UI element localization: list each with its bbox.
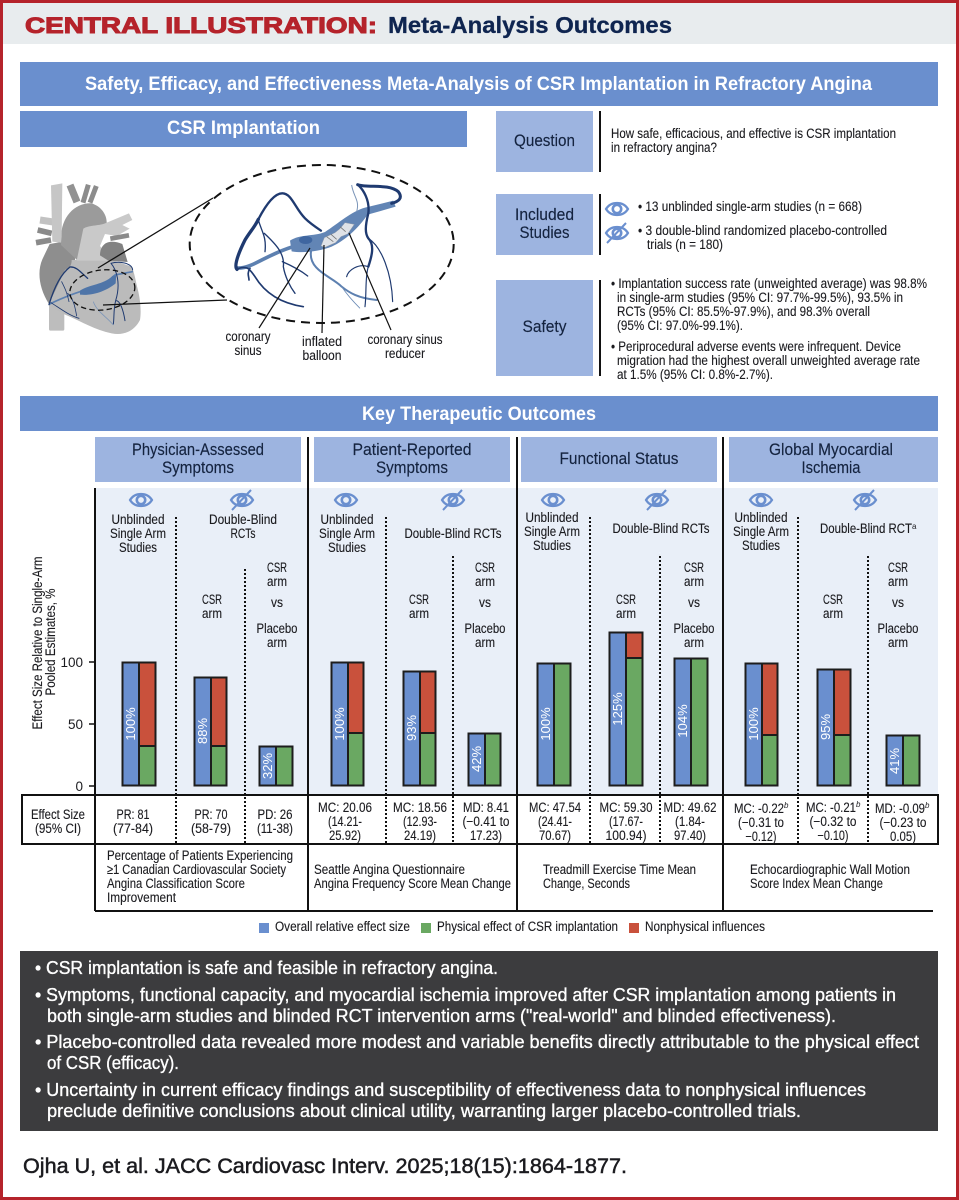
bar: 100% xyxy=(537,663,571,786)
panel: included studies: • 3 double-blind randomized placebo-controlled xyxy=(638,223,887,238)
panel: CSR implantation heading: CSR Implantation xyxy=(167,117,320,139)
values: patient-reported symptoms: (−0.41 to xyxy=(462,814,510,829)
sub-heading: unblinded single arm studies: Studies xyxy=(119,540,157,555)
sub-heading: CSR arm: arm xyxy=(616,606,636,621)
measure: CCS angina class improvement xyxy=(107,848,293,905)
sub-heading: unblinded single arm studies: Studies xyxy=(533,538,571,553)
label: coronary sinus xyxy=(226,248,310,358)
sub-heading: double-blind RCTs xyxy=(612,490,710,536)
column heading: patient-reported symptoms: Patient-Reported xyxy=(352,440,472,459)
heading: key therapeutic outcomes xyxy=(20,396,938,431)
bar: 100% xyxy=(122,662,156,786)
values: patient-reported symptoms: 25.92) xyxy=(329,828,361,843)
sub-heading: CSR arm vs placebo arm: arm xyxy=(888,574,908,589)
sub-heading: CSR arm xyxy=(202,592,222,621)
panel: question xyxy=(496,111,896,172)
values: physician-assessed symptoms: PD: 26 xyxy=(258,807,292,822)
sub-heading: double-blind RCTs xyxy=(404,490,502,541)
values: physician-assessed symptoms: (77-84) xyxy=(113,821,153,836)
sub-heading: unblinded single arm studies xyxy=(319,494,375,555)
column heading: global myocardial ischemia: Ischemia xyxy=(802,458,861,477)
sub-heading: CSR arm vs placebo arm: arm xyxy=(475,574,495,589)
sub-heading: CSR arm vs placebo arm xyxy=(256,560,298,650)
measure: wall motion score index: Echocardiographic Wall Motion xyxy=(750,862,910,877)
bar: 100%: 100% xyxy=(332,707,347,741)
column heading: physician-assessed symptoms: Physician-Assessed xyxy=(132,440,264,459)
panel: safety: migration had the highest overall unweighted average rate xyxy=(617,353,920,368)
bar: 125%: 125% xyxy=(610,692,625,726)
values: functional status: (17.67- xyxy=(609,814,643,829)
values: functional status: 97.40) xyxy=(674,828,706,843)
column heading: functional status xyxy=(521,437,717,482)
bar: 125% xyxy=(609,632,643,786)
sub-heading: CSR arm: arm xyxy=(409,606,429,621)
chart panel background xyxy=(95,488,938,794)
values: global myocardial ischemia: b xyxy=(925,801,930,810)
sub-heading: double-blind RCTs xyxy=(209,490,277,541)
sub-heading: CSR arm vs placebo arm: arm xyxy=(267,574,287,589)
citation: Ojha U, et al. JACC Cardiovasc Interv. 2025;18(15):1864-1877. xyxy=(23,1154,627,1178)
bar: 41%: 41% xyxy=(887,748,902,774)
chart: physician-assessed symptoms xyxy=(110,437,308,844)
title: CENTRAL ILLUSTRATION: xyxy=(25,13,377,38)
panel: safety: at 1.5% (95% CI: 0.8%-2.7%). xyxy=(617,367,773,382)
sub-heading: CSR arm vs placebo arm: Placebo xyxy=(256,621,298,636)
sub-heading: unblinded single arm studies: Studies xyxy=(742,538,780,553)
bar: 100% xyxy=(745,663,778,786)
measure: treadmill exercise time: Treadmill Exercise Time Mean xyxy=(543,862,696,877)
values: global myocardial ischemia: MD: -0.09 xyxy=(875,801,925,816)
main heading banner: Safety, Efficacy, and Effectiveness Meta-Analysis of CSR Implantation in Refractory Angina xyxy=(85,73,872,95)
heading: key therapeutic outcomes: Key Therapeutic Outcomes xyxy=(362,403,596,425)
sub-heading: unblinded single arm studies: Single Arm xyxy=(524,524,580,539)
panel: safety xyxy=(496,276,927,382)
sub-heading: CSR arm vs placebo arm: vs xyxy=(688,595,700,610)
bar: 104%: 104% xyxy=(675,704,690,738)
measure: CCS angina class improvement: ≥1 Canadian Cardiovascular Society xyxy=(107,862,286,877)
sub-heading: unblinded single arm studies xyxy=(524,494,580,553)
bar: 42% xyxy=(468,733,501,786)
sub-heading: CSR arm vs placebo arm: CSR xyxy=(475,560,495,575)
title: Meta-Analysis Outcomes xyxy=(388,12,672,38)
values: patient-reported symptoms: 17.23) xyxy=(470,828,502,843)
values: functional status: MC: 47.54 xyxy=(529,800,581,815)
label: coronary sinus reducer: reducer xyxy=(385,346,425,361)
panel: included studies xyxy=(496,194,887,255)
values: global myocardial ischemia: 0.05) xyxy=(890,829,916,844)
sub-heading: CSR arm xyxy=(409,592,429,621)
chart: functional status xyxy=(524,437,723,844)
values: patient-reported symptoms: (14.21- xyxy=(328,814,362,829)
panel: safety: RCTs (95% CI: 85.5%-97.9%), and 98.3% overall xyxy=(617,304,870,319)
label: coronary sinus: coronary xyxy=(226,329,271,344)
bar: 104% xyxy=(674,658,708,786)
sub-heading: CSR arm vs placebo arm: Placebo xyxy=(464,621,506,636)
sub-heading: CSR arm vs placebo arm: CSR xyxy=(684,560,704,575)
sub-heading: CSR arm: CSR xyxy=(409,592,429,607)
values: global myocardial ischemia: −0.10) xyxy=(818,828,848,843)
sub-heading: CSR arm vs placebo arm: CSR xyxy=(888,560,908,575)
column heading: physician-assessed symptoms xyxy=(95,437,301,482)
measure: treadmill exercise time: Change, Seconds xyxy=(543,876,630,891)
panel: question: Question xyxy=(514,131,575,150)
values: functional status: 70.67) xyxy=(539,828,571,843)
panel: question: in refractory angina? xyxy=(611,140,717,155)
sub-heading: CSR arm vs placebo arm: arm xyxy=(684,635,704,650)
sub-heading: CSR arm: arm xyxy=(823,606,843,621)
bar: 88%: 88% xyxy=(195,718,210,744)
values: functional status: (1.84- xyxy=(675,814,705,829)
measure: CCS angina class improvement: Percentage of Patients Experiencing xyxy=(107,848,293,863)
values: physician-assessed symptoms xyxy=(113,807,293,836)
measure: Seattle Angina Questionnaire: Seattle Angina Questionnaire xyxy=(314,862,465,877)
title xyxy=(25,12,672,38)
panel: key takeaways: both single-arm studies and blinded RCT intervention arms ("real-world" and blinded effectiveness). xyxy=(47,1006,836,1026)
panel: CSR implantation heading xyxy=(20,111,467,147)
values: functional status: (24.41- xyxy=(538,814,572,829)
illustration: heart xyxy=(36,183,141,334)
sub-heading: unblinded single arm studies: Unblinded xyxy=(320,512,374,527)
measure: wall motion score index xyxy=(750,862,910,891)
label: coronary sinus: sinus xyxy=(234,343,262,358)
panel: key takeaways: • Symptoms, functional capacity, and myocardial ischemia improved after CSR implantation among patients in xyxy=(35,985,896,1005)
sub-heading: CSR arm: CSR xyxy=(823,592,843,607)
leader lines from heart to magnified view xyxy=(98,198,227,305)
values: global myocardial ischemia: MC: -0.21 xyxy=(806,800,856,815)
row label: effect size: Effect Size xyxy=(31,807,85,822)
label: inflated balloon: inflated xyxy=(302,334,342,349)
sub-heading: unblinded single arm studies: Single Arm xyxy=(110,526,166,541)
bar: 100%: 100% xyxy=(746,707,761,741)
values: global myocardial ischemia: −0.12) xyxy=(746,829,776,844)
sub-heading: double-blind RCTs: Double-Blind RCTs xyxy=(612,521,710,536)
panel: key takeaways: of CSR (efficacy). xyxy=(47,1053,179,1073)
values: global myocardial ischemia xyxy=(734,800,930,844)
column heading: patient-reported symptoms xyxy=(314,437,510,482)
sub-heading: unblinded single arm studies: Unblinded xyxy=(734,510,788,525)
sub-heading: unblinded single arm studies xyxy=(110,494,166,555)
sub-heading: CSR arm: CSR xyxy=(202,592,222,607)
chart: global myocardial ischemia xyxy=(733,490,920,844)
bar: 100%: 100% xyxy=(538,707,553,741)
sub-heading: unblinded single arm studies: Studies xyxy=(328,540,366,555)
sub-heading: CSR arm vs placebo arm: CSR xyxy=(267,560,287,575)
panel: key takeaways: • CSR implantation is safe and feasible in refractory angina. xyxy=(35,958,498,978)
panel: key takeaways: preclude definitive conclusions about clinical utility, warranting larger placebo-controlled trials. xyxy=(47,1101,801,1121)
measure: CCS angina class improvement: Angina Classification Score xyxy=(107,876,245,891)
table: effect size xyxy=(22,795,938,844)
panel: safety: Safety xyxy=(522,317,567,336)
values: functional status: MD: 49.62 xyxy=(664,800,716,815)
sub-heading: CSR arm vs placebo arm: vs xyxy=(479,595,491,610)
measure: Seattle Angina Questionnaire: Angina Frequency Score Mean Change xyxy=(314,876,511,891)
sub-heading: CSR arm: arm xyxy=(202,606,222,621)
values: patient-reported symptoms: 24.19) xyxy=(404,828,436,843)
sub-heading: CSR arm vs placebo arm: vs xyxy=(271,595,283,610)
main heading banner xyxy=(20,62,938,106)
label: coronary sinus reducer: coronary sinus xyxy=(368,332,443,347)
values: global myocardial ischemia: (−0.31 to xyxy=(738,815,784,830)
values: physician-assessed symptoms: (58-79) xyxy=(191,821,231,836)
row label: effect size xyxy=(31,807,85,836)
values: physician-assessed symptoms: PR: 81 xyxy=(116,807,150,822)
sub-heading: double-blind RCTs: RCTs xyxy=(230,526,256,541)
values: physician-assessed symptoms: PR: 70 xyxy=(194,807,228,822)
column heading: patient-reported symptoms: Symptoms xyxy=(376,458,448,477)
panel: safety: • Periprocedural adverse events were infrequent. Device xyxy=(611,339,901,354)
bar: 88% xyxy=(194,677,227,786)
label: inflated balloon: balloon xyxy=(302,348,342,363)
sub-heading: double-blind RCTs: Double-Blind xyxy=(209,512,277,527)
y axis: 0 xyxy=(75,779,83,794)
values: patient-reported symptoms xyxy=(318,800,510,843)
values: functional status: 100.94) xyxy=(606,828,646,843)
panel: key takeaways: • Placebo-controlled data revealed more modest and variable benefits directly attributable to the physical effect xyxy=(35,1032,919,1052)
sub-heading: CSR arm vs placebo arm: Placebo xyxy=(674,621,714,636)
illustration: magnified coronary sinus xyxy=(190,165,454,323)
panel: included studies: trials (n = 180) xyxy=(647,237,723,252)
bar: 42%: 42% xyxy=(469,746,484,772)
sub-heading: CSR arm vs placebo arm xyxy=(674,560,714,650)
values: global myocardial ischemia: (−0.32 to xyxy=(810,814,856,829)
values: functional status: MC: 59.30 xyxy=(600,800,652,815)
values: functional status xyxy=(529,800,716,843)
sub-heading: CSR arm: CSR xyxy=(616,592,636,607)
panel: safety: (95% CI: 97.0%-99.1%). xyxy=(617,318,743,333)
y axis: 100 xyxy=(60,655,83,670)
panel: included studies: Studies xyxy=(520,223,570,242)
measure: treadmill exercise time xyxy=(543,862,696,891)
sub-heading: unblinded single arm studies: Unblinded xyxy=(526,510,578,525)
sub-heading: double-blind RCT: a xyxy=(912,522,917,531)
row label: effect size: (95% CI) xyxy=(35,821,81,836)
sub-heading: unblinded single arm studies: Single Arm xyxy=(319,526,375,541)
bar: 32% xyxy=(259,746,293,786)
label: inflated balloon xyxy=(302,245,342,363)
sub-heading: CSR arm vs placebo arm: arm xyxy=(267,635,287,650)
values: global myocardial ischemia: MC: -0.22 xyxy=(734,801,784,816)
column heading: physician-assessed symptoms: Symptoms xyxy=(162,458,234,477)
values: physician-assessed symptoms: (11-38) xyxy=(257,821,293,836)
legend: Nonphysical influences xyxy=(645,919,765,934)
table: outcome measures xyxy=(95,844,933,911)
values: patient-reported symptoms: MC: 18.56 xyxy=(393,800,447,815)
measure: Seattle Angina Questionnaire xyxy=(314,862,511,891)
values: patient-reported symptoms: MC: 20.06 xyxy=(318,800,372,815)
panel: question: How safe, efficacious, and effective is CSR implantation xyxy=(611,126,896,141)
sub-heading: CSR arm xyxy=(616,592,636,621)
sub-heading: CSR arm vs placebo arm: arm xyxy=(475,635,495,650)
column heading: global myocardial ischemia: Global Myocardial xyxy=(769,440,893,459)
sub-heading: CSR arm vs placebo arm: vs xyxy=(892,595,904,610)
chart: patient-reported symptoms xyxy=(319,437,517,844)
sub-heading: CSR arm vs placebo arm xyxy=(878,560,918,650)
y axis: Effect Size Relative to Single-Arm xyxy=(30,556,45,730)
panel: included studies: • 13 unblinded single-arm studies (n = 668) xyxy=(638,199,862,214)
sub-heading: CSR arm vs placebo arm: arm xyxy=(684,574,704,589)
legend: Overall relative effect size xyxy=(275,919,410,934)
values: global myocardial ischemia: b xyxy=(856,800,861,809)
bar: 93% xyxy=(403,671,436,786)
bar: 95% xyxy=(817,669,851,786)
sub-heading: unblinded single arm studies: Single Arm xyxy=(733,524,789,539)
sub-heading: CSR arm vs placebo arm: arm xyxy=(888,635,908,650)
column heading: functional status: Functional Status xyxy=(560,449,678,468)
values: global myocardial ischemia: (−0.23 to xyxy=(880,815,926,830)
y axis: 50 xyxy=(68,717,83,732)
sub-heading: unblinded single arm studies: Unblinded xyxy=(112,512,164,527)
values: patient-reported symptoms: (12.93- xyxy=(403,814,437,829)
sub-heading: CSR arm vs placebo arm: Placebo xyxy=(878,621,918,636)
sub-heading: unblinded single arm studies xyxy=(733,494,789,553)
values: global myocardial ischemia: b xyxy=(784,801,789,810)
legend xyxy=(259,919,765,934)
sub-heading: CSR arm xyxy=(823,592,843,621)
y axis: Pooled Estimates, % xyxy=(43,588,58,696)
bar: 41% xyxy=(886,735,920,786)
y axis xyxy=(30,488,95,795)
sub-heading: double-blind RCTs: Double-Blind RCTs xyxy=(404,526,502,541)
values: patient-reported symptoms: MD: 8.41 xyxy=(463,800,509,815)
measure: wall motion score index: Score Index Mean Change xyxy=(750,876,883,891)
bar: 93%: 93% xyxy=(404,715,419,741)
panel: safety: in single-arm studies (95% CI: 97.7%-99.5%), 93.5% in xyxy=(617,290,903,305)
bar: 100% xyxy=(331,662,364,786)
panel: key takeaways xyxy=(20,951,938,1131)
sub-heading: CSR arm vs placebo arm xyxy=(464,560,506,650)
panel: included studies: Included xyxy=(515,205,574,224)
sub-heading: double-blind RCT: Double-Blind RCT xyxy=(820,521,912,536)
measure: CCS angina class improvement: Improvement xyxy=(107,890,176,905)
bar: 100%: 100% xyxy=(123,707,138,741)
sub-heading: double-blind RCT xyxy=(820,490,917,536)
legend: Physical effect of CSR implantation xyxy=(437,919,618,934)
label: coronary sinus reducer xyxy=(349,233,443,361)
bar: 95%: 95% xyxy=(818,714,833,740)
bar: 32%: 32% xyxy=(260,753,275,779)
panel: key takeaways: • Uncertainty in current efficacy findings and susceptibility of effectiveness data to nonphysical influences xyxy=(35,1080,866,1100)
column heading: global myocardial ischemia xyxy=(729,437,938,482)
